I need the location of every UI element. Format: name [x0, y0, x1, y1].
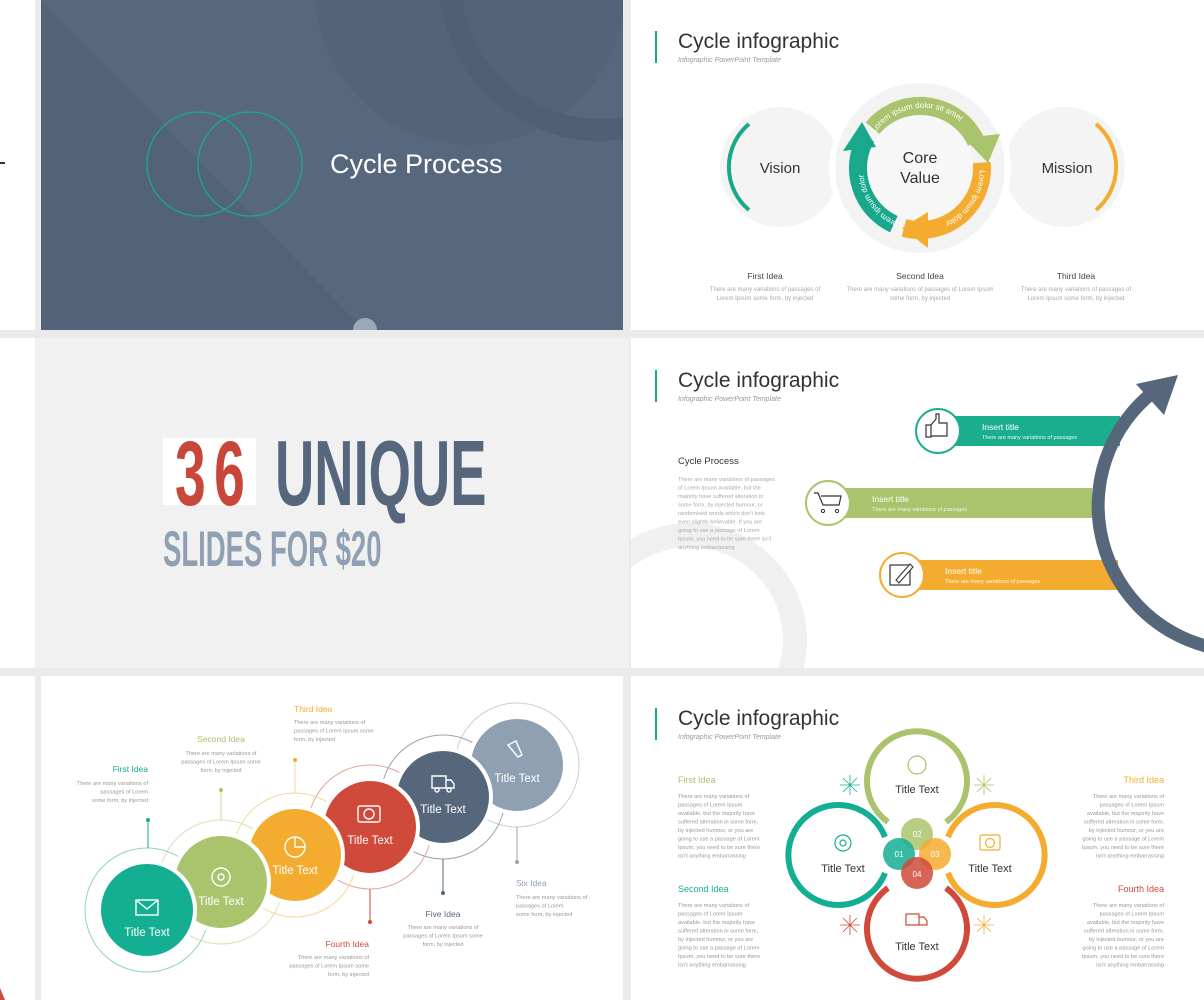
bar: pencil: Insert title [945, 566, 982, 576]
side texts: Third Idea [1123, 775, 1164, 785]
center numbers [883, 818, 951, 889]
center numbers: 04 [913, 870, 922, 879]
panel: cycle process bars: Cycle infographic [678, 369, 839, 392]
side texts: There are many variations of [678, 903, 750, 909]
arrow: big curved arrow [1098, 375, 1204, 647]
idea labels: Fourth Idea [326, 939, 369, 949]
text block: cycle process: Ipsum, you need to be sure there isn't [678, 536, 772, 542]
idea labels: There are many variations of [516, 895, 588, 901]
bar: pencil: There are many variations of passages [945, 579, 1040, 585]
side texts: isn't anything embarrassing [678, 962, 746, 968]
text blocks: ideas [710, 271, 1132, 302]
idea labels: passages of Lorem Ipsum some [294, 728, 374, 734]
text blocks: ideas: Lorem Ipsum some form, by injected [716, 296, 814, 302]
text block: cycle process [678, 456, 775, 551]
text blocks: ideas: There are many variations of passages of Lorem Ipsum [846, 287, 994, 293]
side texts: available, but the majority have [678, 811, 755, 817]
side texts: isn't anything embarrassing [1096, 962, 1164, 968]
side texts: Ipsum, you need to be sure there [1082, 845, 1164, 851]
idea labels: Second Idea [197, 734, 245, 744]
panel: 36 unique slides: UNIQUE [275, 422, 487, 526]
side texts: available, but the majority have [1087, 811, 1164, 817]
text block: cycle process: some form, by injected humour, or [678, 502, 763, 508]
side texts: by injected humour, or you are [678, 828, 753, 834]
text block: cycle process: going to use a passage of Lorem [678, 528, 760, 534]
panel: 36 unique slides: 36 [175, 423, 253, 526]
text block: cycle process: There are many variations of passages [678, 477, 775, 483]
panel: four ring cycle: Title Text [968, 863, 1012, 875]
icons [136, 741, 522, 915]
panel: cycle process bars: Infographic PowerPoint Template [678, 396, 781, 403]
bar: cart: Insert title [872, 494, 909, 504]
circles [99, 717, 565, 958]
side texts: by injected humour, or you are [678, 937, 753, 943]
idea labels: passages of Lorem Ipsum some [403, 934, 483, 940]
idea labels [77, 704, 588, 978]
panel: 36 unique slides: SLIDES FOR $20 [163, 520, 382, 577]
side texts: going to use a passage of Lorem [1083, 946, 1164, 952]
idea labels: form, by injected [422, 942, 464, 948]
panel: four ring cycle: Title Text [895, 784, 939, 796]
side texts: suffered alteration in some form, [678, 928, 759, 934]
side texts: Second Idea [678, 884, 729, 894]
left strip [0, 0, 35, 1000]
center numbers: 01 [895, 850, 904, 859]
text block: cycle process: anything embarrassing [678, 545, 735, 551]
text blocks: ideas: some form, by injected [890, 296, 950, 302]
core value cycle: Lorem ipsum dolor [946, 170, 986, 226]
panel: four ring cycle: Infographic PowerPoint Template [678, 734, 781, 741]
text block: cycle process: randomised words which don't look [678, 511, 765, 517]
idea labels: Six Idea [516, 878, 547, 888]
side texts: going to use a passage of Lorem [1083, 836, 1164, 842]
center numbers: 02 [913, 830, 922, 839]
ring icons and labels [835, 756, 1000, 925]
text blocks: ideas: Lorem Ipsum some form, by injected [1027, 296, 1125, 302]
side texts: There are many variations of [1093, 903, 1164, 909]
text block: cycle process: of Lorem Ipsum available, but the [678, 486, 761, 492]
panel: cycle process cover [41, 0, 623, 330]
core value cycle: Lorem ipsum dolor sit amet [871, 102, 963, 132]
idea labels: form, by injected [200, 768, 242, 774]
side texts: isn't anything embarrassing [1096, 854, 1164, 860]
idea labels: There are many variations of [407, 925, 479, 931]
panel: cycle process bars [631, 338, 1204, 668]
mission circle [1005, 107, 1125, 227]
panel: diagonal circles: Title Text [420, 804, 466, 816]
idea labels: Five Idea [426, 909, 461, 919]
panel: diagonal circles: Title Text [198, 896, 244, 908]
panel: diagonal circles: Title Text [272, 865, 318, 877]
vision circle: Vision [760, 160, 800, 177]
bar: cart: There are many variations of passages [872, 507, 967, 513]
rings [788, 731, 1045, 979]
idea labels: passages of Lorem [516, 904, 564, 910]
panel: cycle infographic vision/mission: Infographic PowerPoint Template [678, 57, 781, 64]
text block: cycle process: even slightly believable. If you are [678, 520, 762, 526]
text block: cycle process: majority have suffered alteration in [678, 494, 763, 500]
side texts: by injected humour, or you are [1089, 828, 1164, 834]
panel: cycle infographic vision/mission [631, 0, 1204, 330]
panel: four ring cycle: Title Text [895, 941, 939, 953]
idea labels: form, by injected [328, 972, 369, 978]
side texts: going to use a passage of Lorem [678, 946, 760, 952]
idea labels: passages of Lorem Ipsum some [289, 964, 369, 970]
panel: diagonal circles: Title Text [347, 835, 393, 847]
idea labels: passages of Lorem Ipsum some [181, 760, 261, 766]
panel: 36 unique slides [35, 338, 629, 668]
idea labels: some form, by injected [92, 798, 148, 804]
side texts: passages of Lorem Ipsum [1100, 912, 1164, 918]
text blocks: ideas: Third Idea [1057, 271, 1095, 281]
vision circle [720, 107, 840, 227]
bar: cart [806, 481, 1092, 525]
side texts: passages of Lorem Ipsum [678, 802, 743, 808]
text blocks: ideas: There are many variations of passages of [710, 287, 821, 293]
side texts: passages of Lorem Ipsum [678, 912, 743, 918]
text blocks: ideas: First Idea [747, 271, 783, 281]
idea labels: There are many variations of [77, 781, 148, 787]
side texts: available, but the majority have [678, 920, 755, 926]
side texts: going to use a passage of Lorem [678, 836, 760, 842]
core value cycle: Core [903, 150, 937, 167]
idea labels: There are many variations of [185, 751, 257, 757]
bar: thumbs up: There are many variations of passages [982, 435, 1077, 441]
panel: diagonal circles: Title Text [124, 927, 170, 939]
panel: diagonal circles: Title Text [494, 773, 540, 785]
side texts: First Idea [678, 775, 716, 785]
side texts: available, but the majority have [1087, 920, 1164, 926]
panel: four ring cycle: Title Text [821, 863, 865, 875]
connectors [146, 758, 519, 924]
center numbers: 03 [931, 850, 940, 859]
side texts: suffered alteration in some form, [678, 820, 759, 826]
stars [840, 775, 994, 935]
side texts: suffered alteration in some form, [1084, 928, 1164, 934]
idea labels: passages of Lorem [100, 790, 148, 796]
side texts: Ipsum, you need to be sure there [678, 954, 760, 960]
panel: four ring cycle: Cycle infographic [678, 707, 839, 730]
idea labels: There are many variations of [294, 720, 366, 726]
side texts: There are many variations of [678, 794, 750, 800]
icon: two overlapping rings [147, 112, 302, 216]
bar: thumbs up: Insert title [982, 422, 1019, 432]
core value cycle: Lorem ipsum dolor [859, 174, 901, 228]
side texts: passages of Lorem Ipsum [1100, 802, 1164, 808]
idea labels: First Idea [113, 764, 148, 774]
side texts [678, 775, 1164, 968]
side texts: Ipsum, you need to be sure there [678, 845, 760, 851]
text blocks: ideas: Second Idea [896, 271, 944, 281]
idea labels: some form, by injected [516, 912, 572, 918]
panel: diagonal circles [41, 676, 623, 1000]
idea labels: Third Idea [294, 704, 333, 714]
side texts: isn't anything embarrassing [678, 854, 746, 860]
text blocks: ideas: There are many variations of passages of [1021, 287, 1132, 293]
side texts: Fourth Idea [1118, 884, 1164, 894]
heading: Cycle Process: Cycle Process [330, 149, 503, 179]
idea labels: There are many variations of [298, 955, 369, 961]
core value cycle [829, 83, 1011, 253]
bar: pencil [880, 553, 1118, 597]
side texts: by injected humour, or you are [1089, 937, 1164, 943]
side texts: suffered alteration in some form, [1084, 820, 1164, 826]
side texts: There are many variations of [1093, 794, 1164, 800]
bar: thumbs up [916, 409, 1120, 453]
side texts: Ipsum, you need to be sure there [1082, 954, 1164, 960]
mission circle: Mission [1042, 160, 1092, 177]
title: Cycle infographic [678, 30, 839, 53]
core value cycle: Value [900, 170, 940, 187]
text block: cycle process: Cycle Process [678, 456, 739, 467]
panel: four ring cycle [631, 676, 1204, 1000]
idea labels: form, by injected [294, 737, 335, 743]
